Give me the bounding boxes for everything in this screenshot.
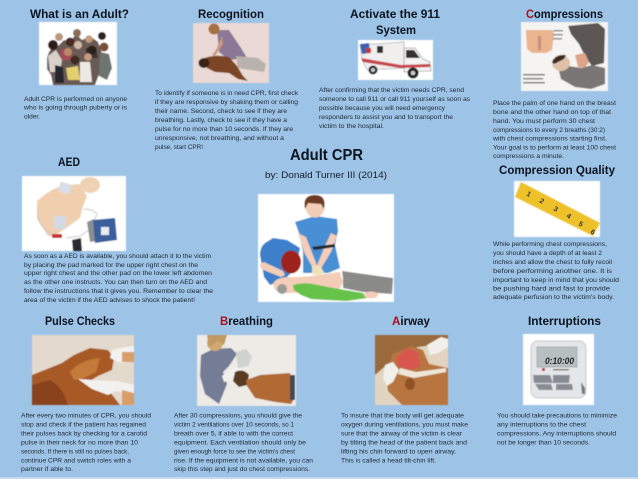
text: pulse checks body: partner if able to. (21, 466, 73, 473)
image: carotid pulse check (32, 335, 134, 405)
heading: AED: AED (58, 157, 80, 169)
text: AED body: follow the instructions that it gives you. Remember to clear the (24, 288, 213, 295)
text: what is an adult body: who is going through puberty or is (23, 104, 127, 112)
text: breathing body: After 30 compressions, you should give the (174, 412, 302, 420)
image: ambulance (358, 40, 433, 80)
text: activate body: possible because you will need emergency (319, 105, 446, 112)
text: airway body: sure that the airway of the victim is clear (341, 430, 463, 438)
heading: Compressions: Compressions (526, 9, 603, 21)
text: breathing body: equipment. Each ventilation should only be (174, 440, 306, 446)
text: pulse checks body: continue CPR and switch roles with a (21, 458, 131, 464)
heading: Activate the 911 System: Activate the 911 (350, 9, 441, 21)
text: AED body: As soon as a AED is available, you should attach it to the victim (24, 253, 211, 260)
text: recognition body: if they are responsive by shaking them or calling (155, 99, 298, 106)
text: what is an adult body: Adult CPR is performed on anyone (24, 96, 127, 103)
image: rescue breathing with mask (197, 335, 296, 406)
text: activate body: victim to the hospital. (319, 123, 384, 130)
text: compressions body: compressions to every 2 breaths (30:2) (493, 127, 605, 134)
subtitle: author: by: Donald Turner III (2014) (265, 170, 387, 181)
text: pulse checks body: After every two minutes of CPR, you should (21, 412, 151, 420)
image: yellow ruler: 3 (552, 206, 559, 214)
text: compressions body: bone and the other hand on top of that (493, 109, 611, 116)
image: yellow ruler (514, 181, 600, 237)
text: compressions body (492, 100, 616, 160)
image: yellow ruler: 6 (589, 229, 596, 237)
text: airway body: lifting his chin forward to open airway. (341, 448, 456, 456)
text: interruptions body: not be longer than 10 seconds. (497, 440, 590, 446)
text: what is an adult body (23, 96, 127, 120)
image: digital timer (523, 334, 594, 405)
text: compression quality body: inches and allow the chest to fully recoil (493, 259, 612, 266)
heading: Compression Quality: Compression Quality (499, 165, 616, 177)
heading: Airway: Airway (392, 316, 431, 328)
text: recognition body: their name. Second, check to see if they are (155, 108, 287, 115)
text: interruptions body: compressions. Any interruptions should (497, 430, 616, 438)
text: what is an adult body: older. (24, 114, 40, 120)
text: compression quality body: be pushing hard and fast to provide (493, 286, 611, 292)
text: compression quality body: before performing another one. It is (493, 268, 612, 275)
text: AED body: by placing the pad marked for the upper right chest on the (24, 262, 198, 269)
text: activate body (319, 87, 470, 130)
image: yellow ruler: 2 (538, 198, 545, 206)
text: airway body (341, 412, 468, 464)
heading: Breathing: Breathing (220, 316, 273, 328)
heading: Activate the 911 System (350, 9, 441, 37)
text: breathing body: skip this step and just do chest compressions. (174, 466, 310, 473)
text: compression quality body (493, 241, 619, 301)
text: activate body: responders to assist you and to transport the (319, 114, 453, 121)
text: AED body: area of the victim if the AED advises to shock the patient! (24, 297, 195, 304)
text: compressions body: Your goal is to perform at least 100 chest (493, 144, 616, 152)
heading: Interruptions: Interruptions (528, 316, 601, 328)
text: compression quality body: While performing chest compressions, (493, 241, 607, 248)
text: interruptions body: any interruptions to the chest (497, 422, 586, 428)
text: compressions body: with chest compressions starting first. (492, 136, 607, 142)
text: interruptions body (497, 412, 617, 446)
text: breathing body: given enough force to see the victim's chest (174, 448, 295, 456)
text: recognition body: pulse for no more than 10 seconds. If they are (155, 126, 293, 133)
image: chest compressions diagram (521, 22, 608, 91)
text: pulse checks body (21, 412, 151, 473)
text: compressions body: Place the palm of one hand on the breast (493, 100, 616, 107)
text: pulse checks body: pulse in their neck for no more than 10 (21, 440, 138, 446)
text: airway body: This is called a head tilt-chin lift. (341, 458, 436, 464)
text: airway body: oxygen during ventilations, you must make (341, 422, 468, 428)
text: AED body: upper right chest and the other pad on the lower left abdomen (24, 270, 212, 277)
text: compression quality body: important to keep in mind that you should (493, 277, 619, 284)
text: pulse checks body: their pulses back by checking for a carotid (21, 430, 147, 438)
heading: Activate the 911 System: System (376, 25, 416, 37)
text: airway body: To insure that the body will get adequate (341, 412, 464, 420)
text: interruptions body: You should take precautions to minimize (497, 412, 617, 420)
text: AED body (24, 253, 213, 304)
text: AED body: as the other one instructs. You can then turn on the AED and (24, 279, 207, 286)
text: recognition body: pulse, start CPR! (155, 144, 203, 151)
text: breathing body: victim 2 ventilations over 10 seconds, so 1 (174, 422, 294, 428)
image: yellow ruler: 5 (577, 221, 584, 229)
text: recognition body: breathing. Lastly, check to see if they have a (155, 117, 287, 124)
heading: Recognition: Recognition (198, 9, 264, 21)
text: airway body: by tilting the head of the patient back and (341, 440, 467, 446)
image: digital timer: 0:10:00 (545, 356, 575, 367)
text: breathing body (174, 412, 313, 473)
text: activate body: After confirming that the victim needs CPR, send (319, 87, 464, 94)
text: pulse checks body: stop and check if the patient has regained (21, 422, 146, 428)
title: Adult CPR (290, 147, 363, 164)
text: compressions body: hand. You must perform 30 chest (493, 118, 595, 125)
image: checking responsiveness (193, 23, 269, 83)
text: activate body: someone to call 911 or call 911 yourself as soon as (319, 96, 470, 103)
image: head tilt chin lift (375, 335, 448, 405)
text: breathing body: breath over 5, if able to with the correct (174, 430, 293, 438)
text: compression quality body: adequate perfusion to the victim's body. (493, 294, 614, 301)
image: yellow ruler: 1 (525, 191, 532, 199)
text: compression quality body: you should have a depth of at least 2 (493, 250, 602, 257)
image: two rescuers performing CPR (258, 194, 394, 302)
text: recognition body: unresponsive, not breathing, and without a (155, 135, 284, 142)
text: recognition body: To identify if someone is in need CPR, first check (155, 90, 299, 97)
heading: What is an Adult?: What is an Adult? (30, 9, 129, 21)
heading: Pulse Checks: Pulse Checks (45, 316, 115, 328)
image: group of adults (39, 22, 117, 85)
image: yellow ruler: 4 (565, 213, 572, 221)
text: compressions body: compressions a minute. (493, 153, 564, 160)
text: recognition body (155, 90, 299, 151)
text: pulse checks body: seconds. If there is still no pulses back, (21, 448, 129, 456)
image: AED trainer and manikin (22, 176, 126, 251)
text: breathing body: rise. If the equipment is not available, you can (174, 458, 313, 464)
